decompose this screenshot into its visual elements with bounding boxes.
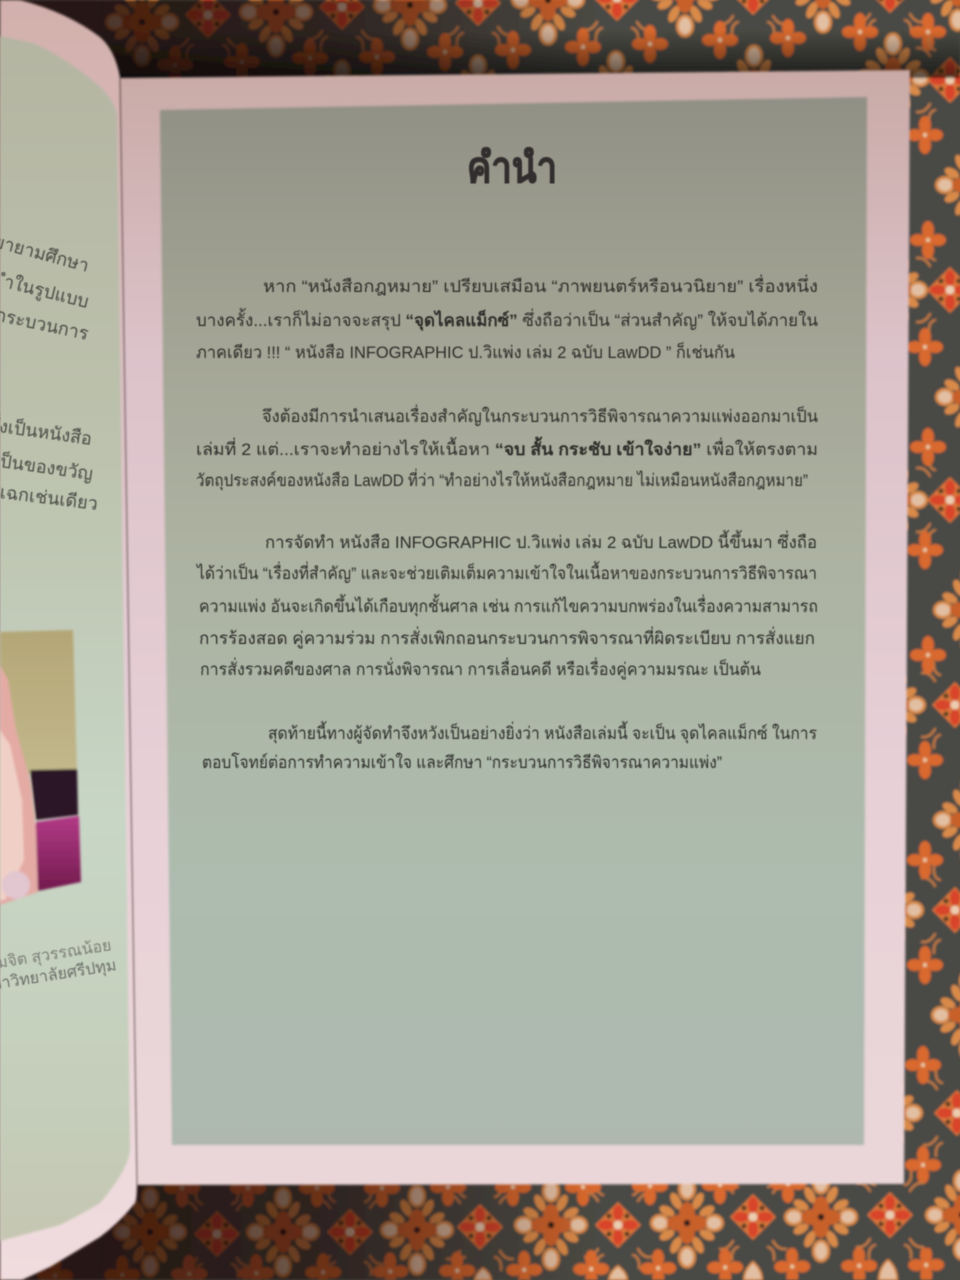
paragraph 2: วัตถุประสงค์ของหนังสือ LawDD ที่ว่า “ทำอย่างไรให้หนังสือกฎหมาย ไม่เหมือนหนังสือกฎหมาย” [196, 468, 808, 491]
green text panel [160, 97, 867, 1145]
title: คำนำ [467, 144, 557, 191]
paragraph 1: บางครั้ง...เราก็ไม่อาจจะสรุป “จุดไคลแม็กซ์” ซึ่งถือว่าเป็น “ส่วนสำคัญ” ให้จบได้ภายใน [196, 308, 818, 331]
paragraph 3: ความแพ่ง อันจะเกิดขึ้นได้เกือบทุกชั้นศาล เช่น การแก้ไขความบกพร่องในเรื่องความสามารถ [199, 594, 818, 617]
paragraph 1 [196, 274, 818, 362]
left page of the book [0, 0, 137, 1280]
paragraph 3 [195, 530, 818, 680]
left page partial paragraph 1 [0, 231, 91, 344]
left page partial paragraph 2 [0, 411, 99, 514]
left page author photo [0, 630, 81, 905]
left page partial paragraph 1: ำในรูปแบบ [0, 269, 91, 313]
paragraph 4 [202, 721, 817, 772]
paragraph 1: ภาคเดียว !!! “ หนังสือ INFOGRAPHIC ป.วิแพ่ง เล่ม 2 ฉบับ LawDD ” ก็เช่นกัน [196, 341, 735, 362]
left page photo caption [0, 936, 118, 995]
paragraph 3: ได้ว่าเป็น “เรื่องที่สำคัญ” และจะช่วยเติมเต็มความเข้าใจในเนื้อหาของกระบวนการวิธีพิจารณา [195, 561, 817, 583]
paragraph 3: การจัดทำ หนังสือ INFOGRAPHIC ป.วิแพ่ง เล่ม 2 ฉบับ LawDD นี้ขึ้นมา ซึ่งถือ [265, 530, 817, 552]
right page of the book [120, 70, 910, 1185]
left page green panel [0, 36, 130, 1241]
paragraph 3: การร้องสอด คู่ความร่วม การสั่งเพิกถอนกระบวนการพิจารณาที่ผิดระเบียบ การสั่งแยก [199, 626, 815, 649]
paragraph 2: เล่มที่ 2 แต่...เราจะทำอย่างไรให้เนื้อหา “จบ สั้น กระชับ เข้าใจง่าย” เพื่อให้ตรงตาม [196, 436, 818, 459]
paragraph 3: การสั่งรวมคดีของศาล การนั่งพิจารณา การเลื่อนคดี หรือเรื่องคู่ความมรณะ เป็นต้น [200, 657, 761, 680]
paragraph 2: จึงต้องมีการนำเสนอเรื่องสำคัญในกระบวนการวิธีพิจารณาความแพ่งออกมาเป็น [262, 404, 818, 426]
paragraph 4: สุดท้ายนี้ทางผู้จัดทำจึงหวังเป็นอย่างยิ่งว่า หนังสือเล่มนี้ จะเป็น จุดไคลแม็กซ์ ในการ [268, 721, 817, 744]
paragraph 2 [196, 404, 818, 491]
paragraph 4: ตอบโจทย์ต่อการทำความเข้าใจ และศึกษา “กระบวนการวิธีพิจารณาความแพ่ง” [202, 752, 722, 772]
paragraph 1: หาก “หนังสือกฎหมาย” เปรียบเสมือน “ภาพยนตร์หรือนวนิยาย” เรื่องหนึ่ง [263, 274, 818, 296]
